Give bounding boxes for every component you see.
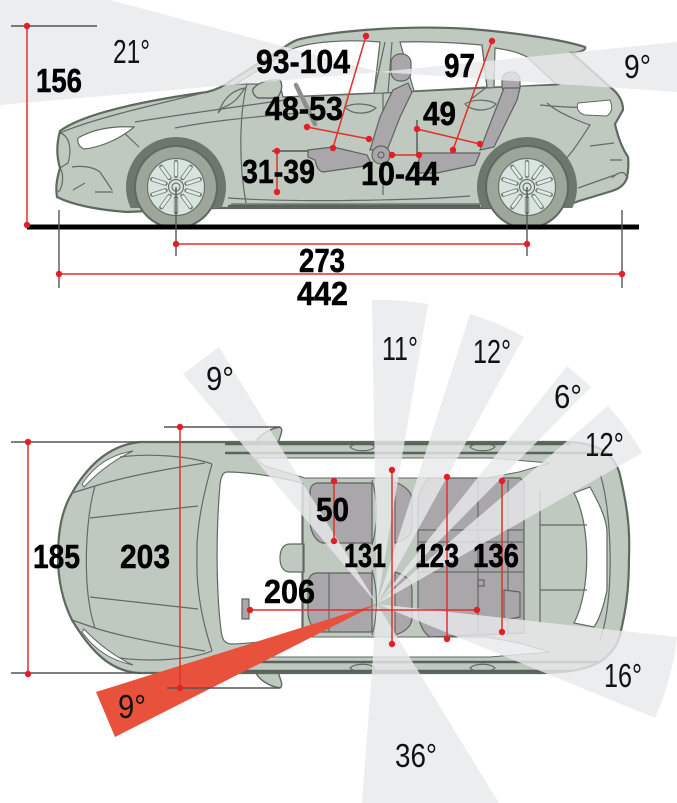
rear view marker (242, 599, 249, 619)
guide lines top view (11, 427, 280, 688)
front seats (308, 480, 412, 635)
label 48-53: 48-53 (265, 90, 343, 127)
red dimension lines top (25, 424, 505, 691)
top view car (58, 427, 629, 688)
side mirror (253, 80, 282, 98)
label 156: 156 (36, 62, 82, 99)
rear wheel (486, 146, 568, 228)
mirrors (255, 427, 282, 688)
label 6 degrees: 6° (554, 378, 582, 415)
label 97: 97 (444, 47, 475, 84)
rear bench (418, 478, 524, 637)
label 273: 273 (299, 242, 345, 279)
label 442: 442 (297, 275, 348, 312)
front seat (308, 54, 412, 172)
tail light (577, 100, 612, 116)
pillars and body lines (58, 42, 626, 204)
sight wedge 6 degrees (377, 366, 591, 604)
label 203: 203 (120, 538, 170, 575)
top view labels (33, 330, 642, 774)
label 10-44: 10-44 (361, 155, 440, 192)
label 12 degrees right: 12° (585, 426, 624, 463)
label 9 degrees rear: 9° (624, 48, 651, 85)
red sight wedge 9 degrees (96, 604, 377, 737)
label 50: 50 (316, 491, 349, 528)
label 11 degrees: 11° (382, 330, 418, 367)
sight wedge 21 degrees forward (0, 0, 379, 105)
ground line (27, 224, 639, 230)
label 31-39: 31-39 (242, 153, 315, 190)
wheel arches (126, 137, 577, 208)
label 9 degrees red wedge: 9° (118, 688, 146, 725)
label 93-104: 93-104 (256, 43, 351, 80)
sight wedge 36 degrees (362, 604, 499, 803)
red dimension lines side (24, 23, 625, 277)
car body top (58, 442, 629, 673)
label 16 degrees: 16° (604, 657, 642, 694)
label 131: 131 (344, 537, 386, 574)
side view labels (36, 33, 651, 312)
sight wedge 9 degrees left mirror (183, 347, 377, 604)
sight wedge 11 degrees (372, 300, 428, 604)
headlight (78, 127, 134, 149)
sight wedge 12 degrees right (377, 406, 642, 604)
label 21 degrees: 21° (113, 33, 150, 70)
door sill bands (225, 444, 600, 671)
dashboard bump (280, 544, 304, 572)
rear seat (417, 72, 520, 173)
label 206: 206 (264, 573, 315, 610)
label 185: 185 (33, 538, 80, 575)
sill band (228, 205, 480, 207)
sight wedge 9 degrees rearward (379, 42, 677, 92)
windows (236, 41, 557, 97)
label 123: 123 (415, 537, 459, 574)
steering wheel (296, 85, 315, 124)
label 9 degrees left: 9° (206, 360, 234, 397)
label 49: 49 (423, 95, 456, 132)
side windows (255, 458, 550, 657)
rear window (574, 487, 607, 627)
front wheel (135, 146, 217, 228)
guide lines (11, 26, 622, 288)
sight wedge 12 degrees (377, 314, 524, 604)
label 36 degrees: 36° (395, 737, 437, 774)
label 136: 136 (473, 537, 519, 574)
headlight slivers (82, 451, 133, 665)
sight wedge 16 degrees (377, 604, 677, 718)
bonnet and trunk lines (72, 443, 610, 672)
car body side (56, 28, 628, 212)
windscreen (217, 472, 302, 644)
side view car (56, 28, 628, 237)
label 12 degrees: 12° (473, 333, 511, 370)
